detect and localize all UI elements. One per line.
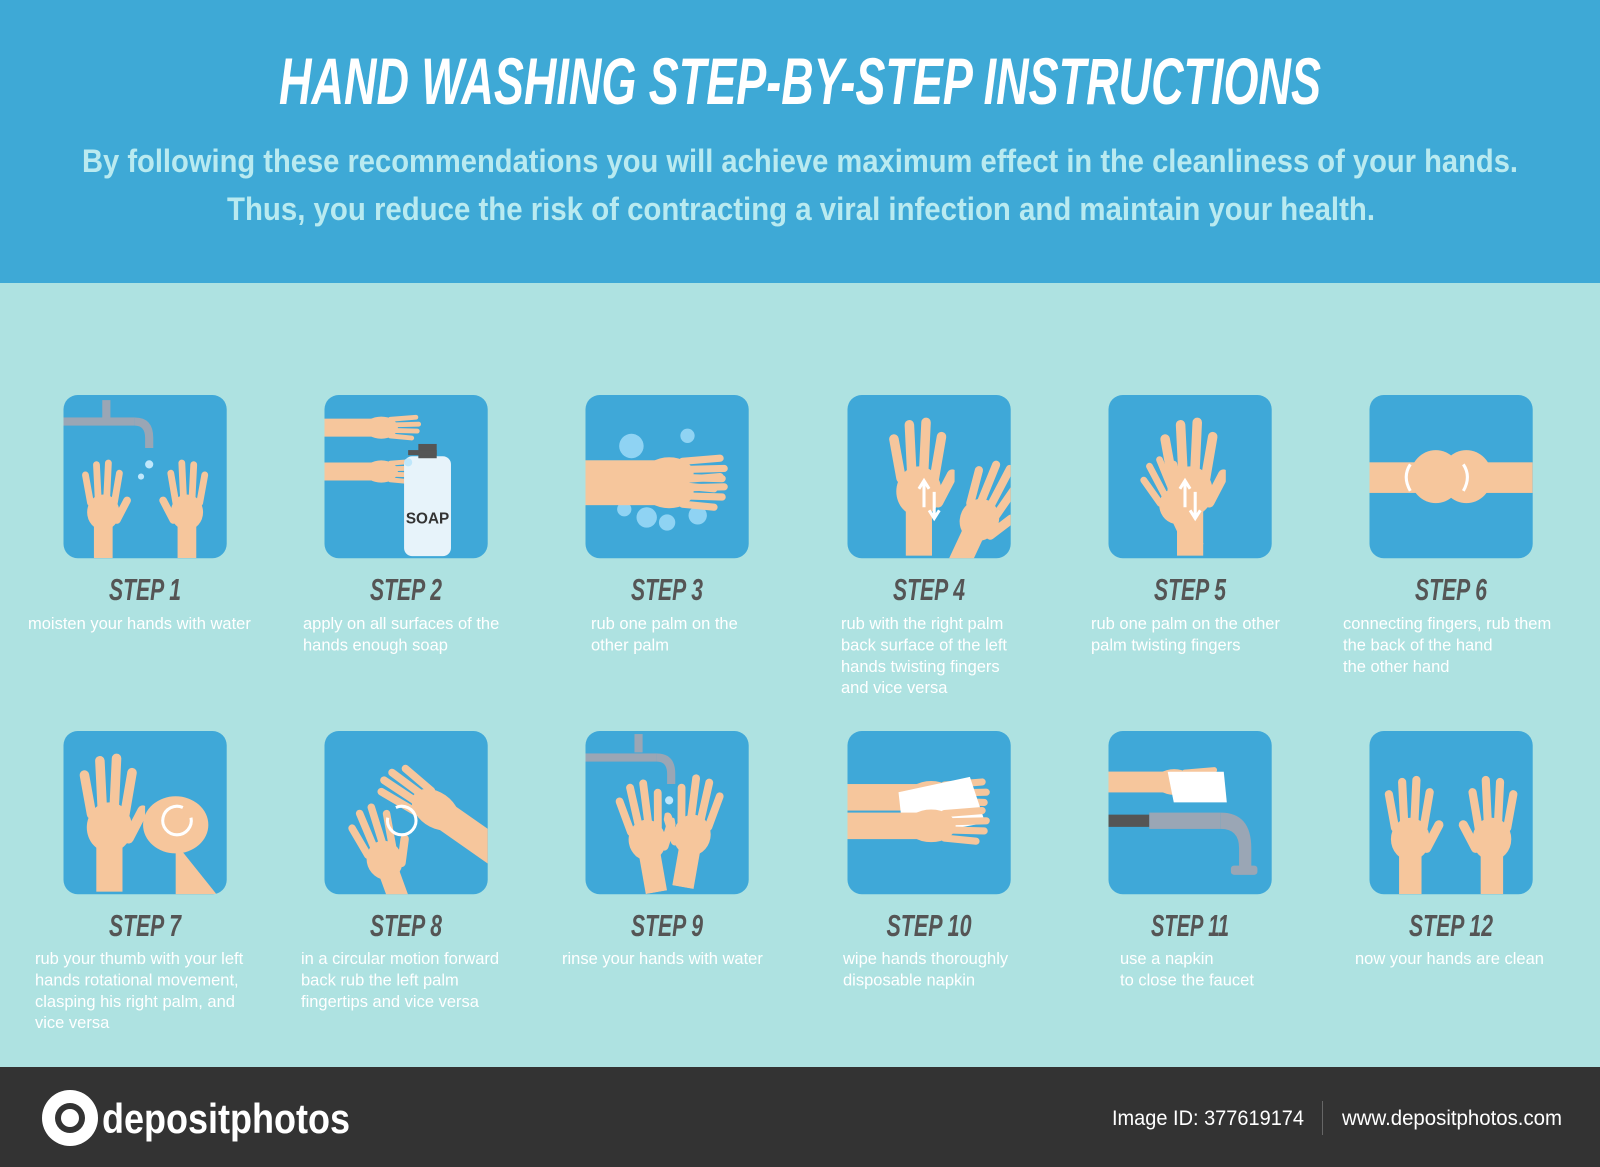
icon: thumb rotation (64, 731, 227, 894)
label: step 9: STEP 9 (631, 908, 704, 943)
description: rinse your hands with water (562, 950, 763, 968)
description: disposable napkin (843, 971, 975, 989)
description: the other hand (1343, 658, 1449, 676)
description: rub one palm on the (591, 615, 738, 633)
icon: close faucet (1108, 731, 1272, 894)
icon: camera logo (42, 1090, 98, 1146)
description: moisten your hands with water (28, 615, 251, 633)
description: other palm (591, 636, 669, 654)
icon: fingertips circular (324, 731, 488, 894)
icon: rub palms (586, 395, 749, 558)
icon: soap dispenser: SOAP (406, 511, 449, 528)
step 2 (303, 395, 499, 654)
website: www.depositphotos.com (1341, 1107, 1562, 1130)
icon: rinse (586, 731, 749, 896)
label: step 4: STEP 4 (893, 572, 965, 607)
subtitle: Thus, you reduce the risk of contracting a viral infection and maintain your health. (227, 191, 1375, 227)
description: now your hands are clean (1355, 950, 1544, 968)
label: step 5: STEP 5 (1154, 572, 1227, 607)
icon: back of hand (848, 395, 1011, 558)
step 6 (1343, 395, 1551, 676)
icon: twisting fingers (1108, 395, 1272, 558)
description: back rub the left palm (301, 971, 459, 989)
description: palm twisting fingers (1091, 636, 1240, 654)
label: step 8: STEP 8 (370, 908, 443, 943)
label: step 2: STEP 2 (370, 572, 442, 607)
icon: clean hands (1370, 731, 1533, 894)
icon: faucet and hands (64, 395, 227, 558)
icon: napkin (848, 731, 1011, 894)
step 1 (28, 395, 251, 633)
description: clasping his right palm, and (35, 993, 235, 1011)
description: connecting fingers, rub them (1343, 615, 1551, 633)
description: fingertips and vice versa (301, 993, 480, 1011)
icon: soap dispenser (324, 395, 488, 558)
description: vice versa (35, 1014, 110, 1032)
step 11 (1108, 731, 1272, 989)
label: step 10: STEP 10 (886, 908, 972, 943)
step 12 (1355, 731, 1544, 968)
description: rub one palm on the other (1091, 615, 1280, 633)
description: rub your thumb with your left (35, 950, 243, 968)
logo text: depositphotos (102, 1095, 350, 1142)
description: use a napkin (1120, 950, 1214, 968)
label: step 7: STEP 7 (109, 908, 182, 943)
subtitle (82, 143, 1518, 227)
step 5 (1091, 395, 1280, 654)
step 7 (35, 731, 244, 1032)
step 10 (842, 731, 1011, 989)
description: wipe hands thoroughly (843, 950, 1008, 968)
description: back surface of the left (841, 636, 1007, 654)
step 9 (562, 731, 763, 968)
label: step 12: STEP 12 (1409, 908, 1493, 943)
label: step 11: STEP 11 (1151, 908, 1229, 943)
description: the back of the hand (1343, 636, 1493, 654)
label: step 1: STEP 1 (109, 572, 181, 607)
description: hands twisting fingers (841, 658, 1000, 676)
description: apply on all surfaces of the (303, 615, 499, 633)
description: in a circular motion forward (301, 950, 499, 968)
footer (0, 1067, 1600, 1167)
description: and vice versa (841, 679, 948, 697)
step 8 (301, 731, 519, 1011)
header band (0, 0, 1600, 283)
icon: connecting fingers (1370, 395, 1533, 558)
description: to close the faucet (1120, 971, 1254, 989)
label: step 6: STEP 6 (1415, 572, 1488, 607)
step 4 (842, 395, 1011, 693)
description: hands rotational movement, (35, 971, 239, 989)
step 3 (586, 395, 749, 654)
label: step 3: STEP 3 (631, 572, 703, 607)
description: hands enough soap (303, 636, 448, 654)
image id: Image ID: 377619174 (1112, 1107, 1304, 1130)
description: rub with the right palm (841, 615, 1003, 633)
